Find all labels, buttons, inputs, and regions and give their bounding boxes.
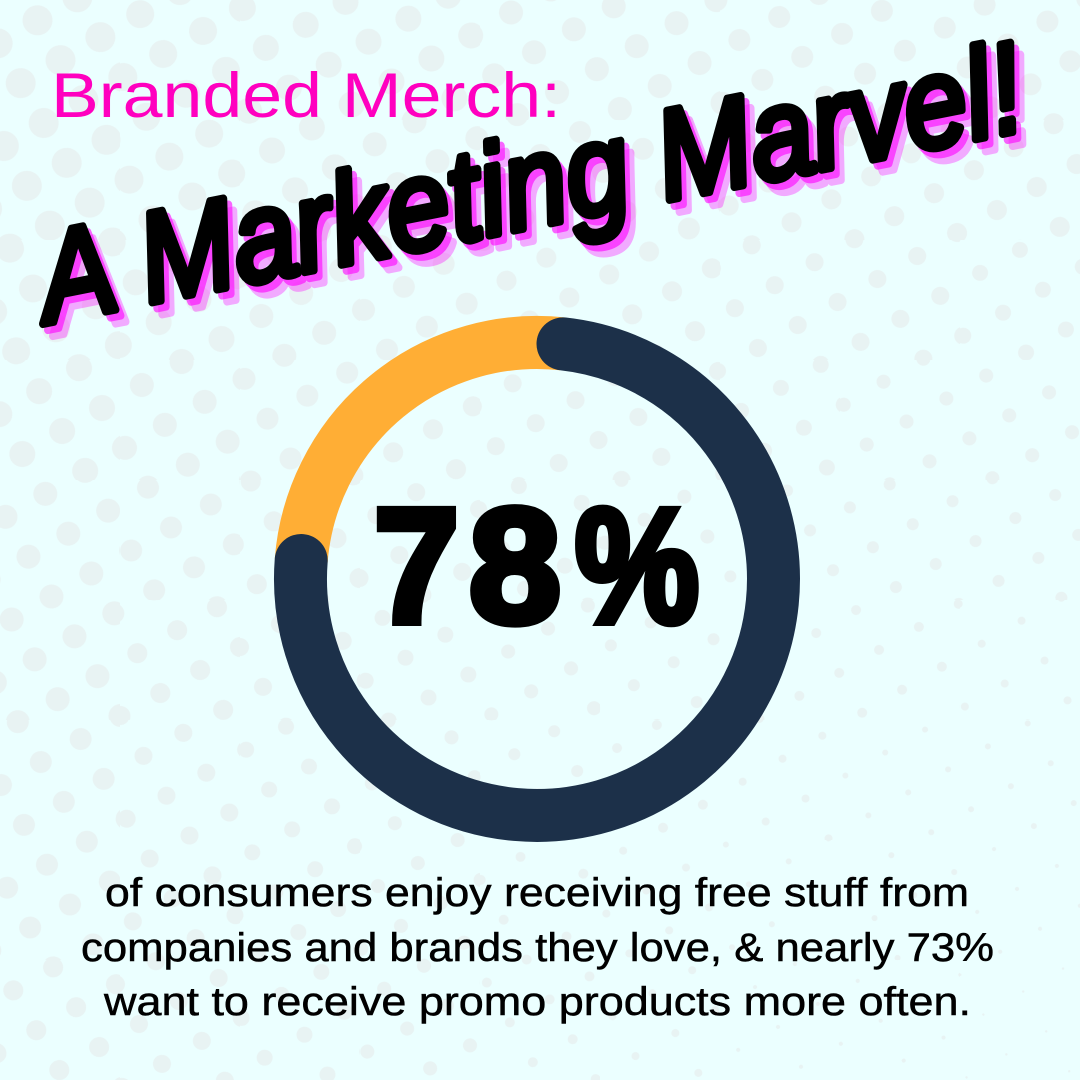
big number: 78%: %: [575, 474, 699, 657]
big number: 78%: [374, 474, 699, 657]
body text: companies and brands they love, & nearly 73%: [81, 926, 994, 970]
heading: Branded Merch: Branded Merch:: [51, 61, 561, 131]
chart segment: remaining 22 percent: [301, 342, 563, 560]
body text: of consumers enjoy receiving free stuff from: [105, 871, 969, 915]
big number: 78%: 8: [469, 474, 561, 657]
body text: [81, 871, 994, 1024]
chart segment: 78 percent: [300, 344, 773, 815]
body text: want to receive promo products more often.: [103, 980, 971, 1024]
donut chart: 78 percent: [300, 342, 773, 815]
big number: 78%: 7: [374, 474, 459, 657]
